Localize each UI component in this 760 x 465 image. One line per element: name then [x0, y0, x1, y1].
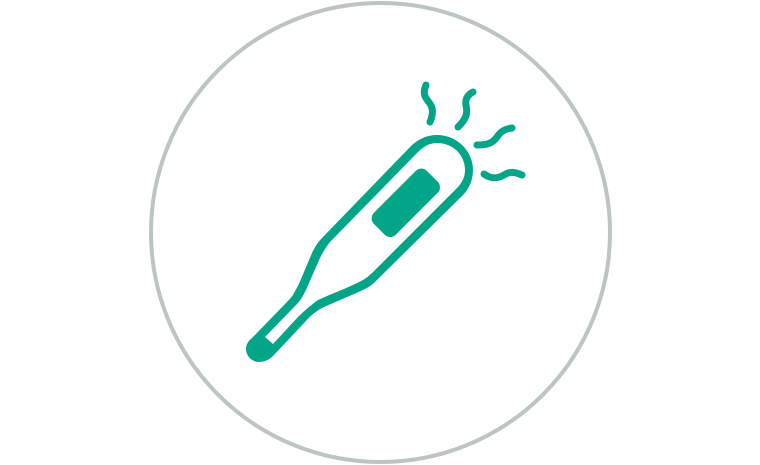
- heat wave 1: [424, 85, 432, 122]
- icon: thermometer: [246, 85, 522, 362]
- thermometer body and bulb: [246, 135, 473, 362]
- heat wave 2: [458, 92, 473, 127]
- thermometer display: [368, 165, 443, 240]
- outer circle: [151, 3, 610, 462]
- heat wave 3: [477, 128, 512, 145]
- heat wave 4: [484, 172, 522, 178]
